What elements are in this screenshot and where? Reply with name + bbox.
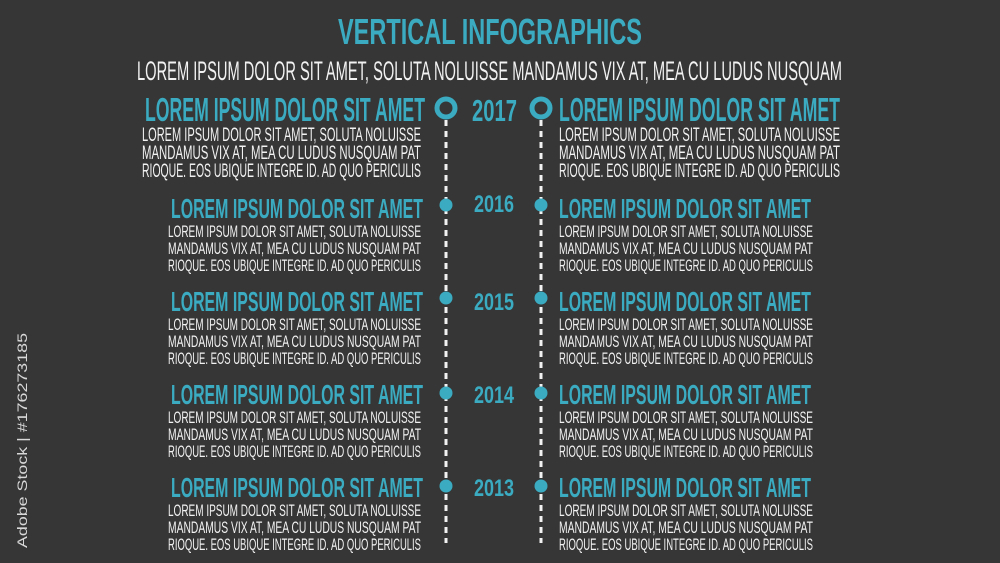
row 2014: LOREM IPSUM DOLOR SIT AMET, SOLUTA NOLUISSE xyxy=(559,408,813,427)
row 2016: LOREM IPSUM DOLOR SIT AMET xyxy=(171,193,423,224)
row 2013: LOREM IPSUM DOLOR SIT AMET, SOLUTA NOLUISSE xyxy=(559,501,813,520)
row 2014: RIOQUE. EOS UBIQUE INTEGRE ID. AD QUO PERICULIS xyxy=(168,442,421,461)
row 2013: RIOQUE. EOS UBIQUE INTEGRE ID. AD QUO PERICULIS xyxy=(168,535,421,554)
row 2014: 2014 xyxy=(474,382,514,409)
row 2015: 2015 xyxy=(474,289,514,316)
row 2017 xyxy=(142,91,840,182)
row 2013: 2013 xyxy=(474,475,514,502)
row 2016: MANDAMUS VIX AT, MEA CU LUDUS NUSQUAM PAT xyxy=(559,239,813,258)
row 2013: LOREM IPSUM DOLOR SIT AMET, SOLUTA NOLUISSE xyxy=(168,501,421,520)
left body: MANDAMUS VIX AT, MEA CU LUDUS NUSQUAM PAT xyxy=(142,143,421,164)
row 2015: LOREM IPSUM DOLOR SIT AMET, SOLUTA NOLUISSE xyxy=(168,315,421,334)
row 2013: LOREM IPSUM DOLOR SIT AMET xyxy=(171,472,423,503)
row 2016: RIOQUE. EOS UBIQUE INTEGRE ID. AD QUO PERICULIS xyxy=(168,256,421,275)
row 2016: LOREM IPSUM DOLOR SIT AMET, SOLUTA NOLUISSE xyxy=(168,222,421,241)
row 2015: MANDAMUS VIX AT, MEA CU LUDUS NUSQUAM PAT xyxy=(559,332,813,351)
right body xyxy=(559,125,840,182)
row 2015: RIOQUE. EOS UBIQUE INTEGRE ID. AD QUO PERICULIS xyxy=(559,349,813,368)
row 2015: RIOQUE. EOS UBIQUE INTEGRE ID. AD QUO PERICULIS xyxy=(168,349,421,368)
left heading: LOREM IPSUM DOLOR SIT AMET xyxy=(145,91,425,128)
row 2015: MANDAMUS VIX AT, MEA CU LUDUS NUSQUAM PAT xyxy=(168,332,421,351)
left body: RIOQUE. EOS UBIQUE INTEGRE ID. AD QUO PERICULIS xyxy=(142,161,421,182)
row 2016: 2016 xyxy=(474,191,514,218)
row 2013: RIOQUE. EOS UBIQUE INTEGRE ID. AD QUO PERICULIS xyxy=(559,535,813,554)
row 2016 xyxy=(168,191,813,275)
row 2015: LOREM IPSUM DOLOR SIT AMET xyxy=(171,286,423,317)
row 2014 xyxy=(168,379,813,461)
year 2017: 2017 xyxy=(472,93,517,128)
icon: ring left xyxy=(437,99,455,117)
row 2015 xyxy=(168,286,813,368)
row 2014: MANDAMUS VIX AT, MEA CU LUDUS NUSQUAM PAT xyxy=(559,425,813,444)
row 2014: LOREM IPSUM DOLOR SIT AMET xyxy=(171,379,423,410)
title: VERTICAL INFOGRAPHICS xyxy=(338,11,642,52)
left body xyxy=(142,125,421,182)
row 2016: MANDAMUS VIX AT, MEA CU LUDUS NUSQUAM PAT xyxy=(168,239,421,258)
row 2013 xyxy=(168,472,813,554)
row 2015: LOREM IPSUM DOLOR SIT AMET xyxy=(559,286,811,317)
icon: ring right xyxy=(532,99,550,117)
row 2014: LOREM IPSUM DOLOR SIT AMET xyxy=(559,379,811,410)
left body: LOREM IPSUM DOLOR SIT AMET, SOLUTA NOLUISSE xyxy=(142,125,421,146)
timeline lines xyxy=(446,120,541,543)
row 2016: LOREM IPSUM DOLOR SIT AMET, SOLUTA NOLUISSE xyxy=(559,222,813,241)
row 2014: LOREM IPSUM DOLOR SIT AMET, SOLUTA NOLUISSE xyxy=(168,408,421,427)
row 2013: LOREM IPSUM DOLOR SIT AMET xyxy=(559,472,811,503)
row 2014: RIOQUE. EOS UBIQUE INTEGRE ID. AD QUO PERICULIS xyxy=(559,442,813,461)
row 2016: LOREM IPSUM DOLOR SIT AMET xyxy=(559,193,811,224)
row 2015: LOREM IPSUM DOLOR SIT AMET, SOLUTA NOLUISSE xyxy=(559,315,813,334)
row 2013: MANDAMUS VIX AT, MEA CU LUDUS NUSQUAM PAT xyxy=(559,518,813,537)
row 2016: RIOQUE. EOS UBIQUE INTEGRE ID. AD QUO PERICULIS xyxy=(559,256,813,275)
row 2014: MANDAMUS VIX AT, MEA CU LUDUS NUSQUAM PAT xyxy=(168,425,421,444)
row 2013: MANDAMUS VIX AT, MEA CU LUDUS NUSQUAM PAT xyxy=(168,518,421,537)
watermark id: Adobe Stock | #176273185 xyxy=(14,333,30,548)
